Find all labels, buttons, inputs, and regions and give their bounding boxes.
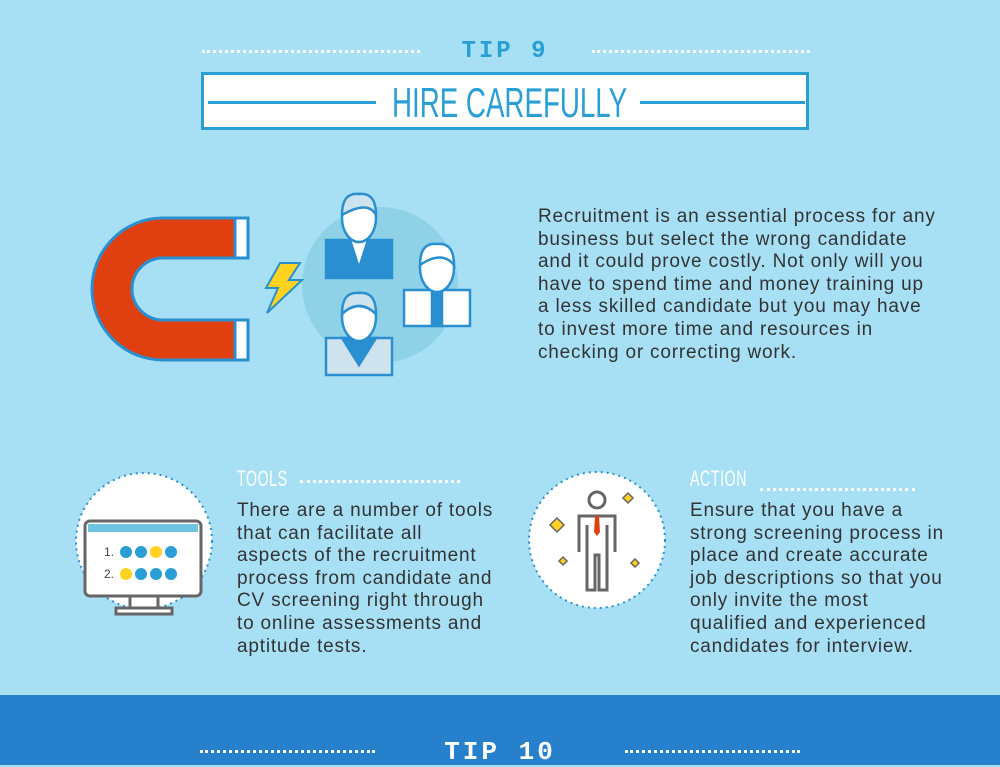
illustration: magnet attracting candidates — [90, 192, 472, 376]
action text — [690, 500, 944, 657]
action text: Ensure that you have a — [690, 500, 903, 521]
intro text: Recruitment is an essential process for any — [538, 206, 936, 227]
tools text: aptitude tests. — [237, 636, 367, 657]
footer band: tip 10: TIP 10 — [444, 737, 556, 767]
action text: candidates for interview. — [690, 636, 914, 657]
tools text — [237, 500, 493, 657]
tools heading: TOOLS — [237, 466, 288, 491]
intro text: and it could prove costly. Not only will you — [538, 251, 923, 272]
action text: only invite the most — [690, 590, 869, 611]
icon: computer test: 1. — [104, 545, 114, 559]
title banner — [201, 72, 809, 130]
title banner: HIRE CAREFULLY — [392, 79, 627, 126]
icon: lightning — [266, 263, 302, 313]
intro text: have to spend time and money training up — [538, 274, 924, 295]
intro text — [538, 206, 936, 363]
action text: job descriptions so that you — [690, 568, 943, 589]
icon: computer test: 2. — [104, 567, 114, 581]
tools text: to online assessments and — [237, 613, 482, 634]
tools text: aspects of the recruitment — [237, 545, 476, 566]
tip 9 label — [202, 38, 810, 65]
magnet — [92, 218, 248, 360]
tools text: that can facilitate all — [237, 523, 422, 544]
people circle — [302, 194, 470, 375]
tools heading — [237, 466, 460, 491]
icon: computer test — [75, 472, 213, 616]
action text: qualified and experienced — [690, 613, 927, 634]
tip 9 label: TIP 9 — [461, 38, 548, 65]
footer band: tip 10 — [0, 695, 1000, 765]
intro text: business but select the wrong candidate — [538, 229, 907, 250]
action text: strong screening process in — [690, 523, 944, 544]
action heading — [690, 466, 915, 491]
action text: place and create accurate — [690, 545, 929, 566]
intro text: to invest more time and resources in — [538, 319, 873, 340]
intro text: checking or correcting work. — [538, 342, 797, 363]
intro text: a less skilled candidate but you may have — [538, 296, 921, 317]
tools text: process from candidate and — [237, 568, 492, 589]
icon: candidate — [528, 471, 666, 609]
action heading: ACTION — [690, 466, 747, 491]
tools text: CV screening right through — [237, 590, 484, 611]
tools text: There are a number of tools — [237, 500, 493, 521]
